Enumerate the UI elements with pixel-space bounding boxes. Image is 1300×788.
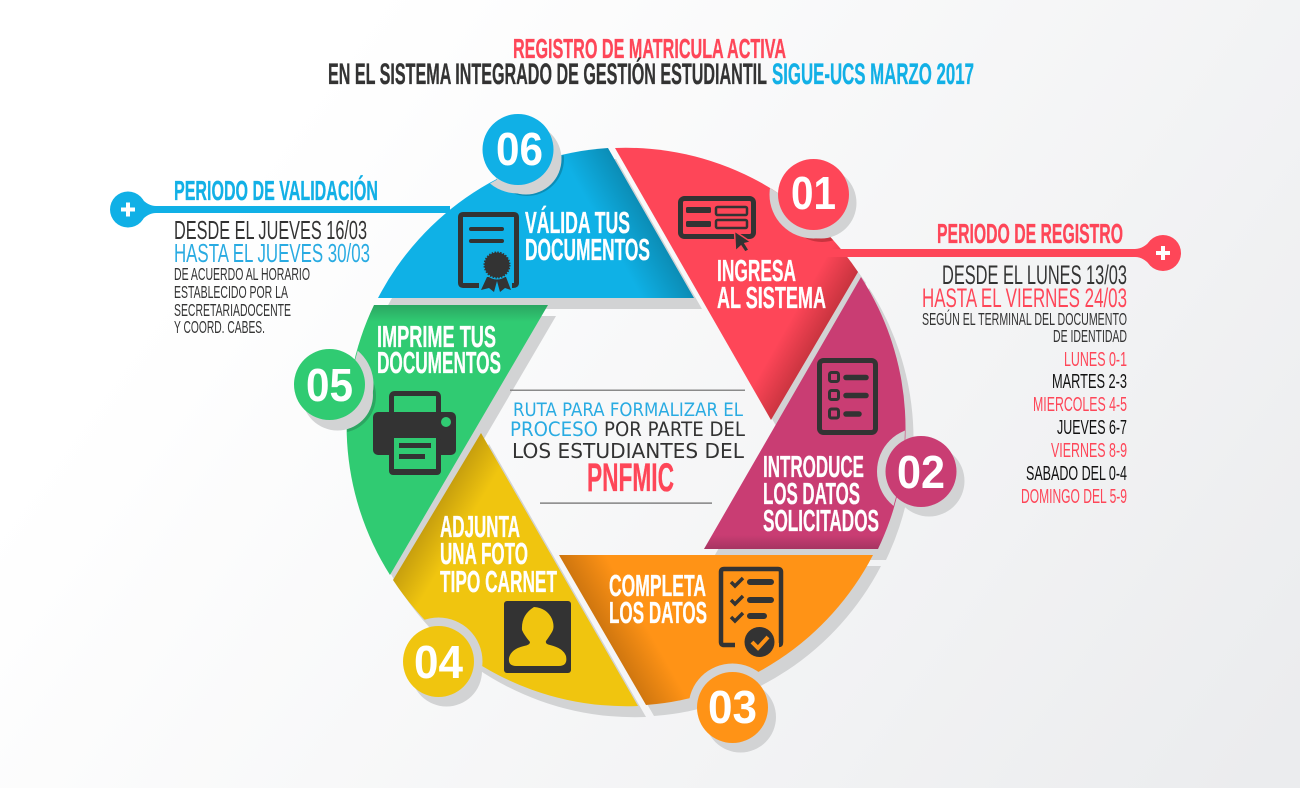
badge 05 [294, 349, 376, 432]
step labels: COMPLETA [609, 568, 706, 603]
badge 02 [877, 428, 965, 516]
registration connector line with knob [827, 235, 1181, 271]
step labels: LOS DATOS [763, 476, 860, 511]
step labels [377, 205, 879, 630]
badge 02: 02 [897, 446, 945, 498]
validation period text: PERIODO DE VALIDACIÓN [174, 175, 378, 206]
icon: certificate document [460, 214, 516, 292]
step labels: INTRODUCE [763, 449, 864, 484]
registration period text: LUNES 0-1 [1064, 348, 1127, 371]
step labels: ADJUNTA [440, 509, 520, 544]
registration period text: DESDE EL LUNES 13/03 [942, 260, 1127, 290]
registration period text: MIERCOLES 4-5 [1033, 393, 1127, 416]
registration period text: VIERNES 8-9 [1051, 439, 1127, 462]
registration period text [922, 218, 1127, 508]
badge 06: 06 [496, 123, 543, 175]
step labels: LOS DATOS [609, 595, 707, 630]
icon: form window with cursor [680, 198, 754, 252]
segment 06 blue [378, 148, 694, 298]
center text: PNFMIC [587, 456, 674, 500]
segment shadows [355, 159, 914, 717]
step labels: INGRESA [717, 253, 796, 288]
segment 04 yellow [393, 433, 638, 706]
center text: LOS ESTUDIANTES DEL [512, 439, 745, 463]
step labels: UNA FOTO [440, 536, 528, 571]
icon: printer [373, 394, 456, 475]
validation period text: DE ACUERDO AL HORARIO [174, 264, 310, 284]
step labels: DOCUMENTOS [377, 345, 501, 380]
validation period text [174, 175, 378, 337]
segment 05 green [347, 305, 548, 575]
segment 03 orange [559, 555, 873, 705]
center text: PROCESO [510, 418, 598, 441]
center text: POR PARTE DEL [604, 418, 745, 441]
step labels: TIPO CARNET [440, 564, 557, 599]
icon: completed checklist [721, 569, 781, 657]
badge 05: 05 [306, 359, 353, 411]
step labels: AL SISTEMA [717, 280, 826, 315]
validation period text: HASTA EL JUEVES 30/03 [174, 238, 370, 268]
step labels: SOLICITADOS [763, 503, 879, 538]
title: REGISTRO DE MATRICULA ACTIVA [513, 33, 786, 64]
step labels: VÁLIDA TUS [525, 205, 630, 240]
validation period text: Y COORD. CABES. [174, 317, 265, 337]
icon: ID photo portrait [504, 601, 571, 673]
validation period text: DESDE EL JUEVES 16/03 [174, 215, 367, 245]
icon: checklist form [820, 360, 876, 432]
badge 03: 03 [708, 681, 757, 733]
step labels: DOCUMENTOS [525, 232, 650, 267]
center text [510, 390, 745, 504]
validation connector line with knob [110, 192, 450, 228]
title [328, 33, 974, 91]
registration period text: DOMINGO DEL 5-9 [1021, 485, 1127, 508]
registration period text: MARTES 2-3 [1052, 370, 1127, 393]
badge 01 [770, 159, 856, 242]
badge 03 [688, 664, 776, 752]
step labels: IMPRIME TUS [377, 319, 496, 354]
validation period text: SECRETARIADOCENTE [174, 300, 291, 320]
registration period text: HASTA EL VIERNES 24/03 [922, 283, 1127, 313]
badge 06 [482, 114, 564, 196]
registration period text: JUEVES 6-7 [1057, 416, 1127, 439]
title: EN EL SISTEMA INTEGRADO DE GESTIÓN ESTUDIANTIL [328, 57, 767, 91]
badge 04: 04 [414, 636, 463, 688]
center text: RUTA PARA FORMALIZAR EL [513, 400, 744, 421]
segment 02 magenta [704, 277, 906, 549]
registration period text: DE IDENTIDAD [1053, 326, 1127, 346]
registration period text: SABADO DEL 0-4 [1026, 462, 1127, 485]
segment 01 red [615, 148, 858, 420]
registration period text: SEGÚN EL TERMINAL DEL DOCUMENTO [922, 308, 1127, 329]
title: SIGUE-UCS MARZO 2017 [772, 58, 974, 91]
badge 01: 01 [791, 167, 836, 219]
registration period text: PERIODO DE REGISTRO [937, 218, 1123, 249]
validation period text: ESTABLECIDO POR LA [174, 282, 288, 302]
badge 04 [394, 618, 482, 706]
